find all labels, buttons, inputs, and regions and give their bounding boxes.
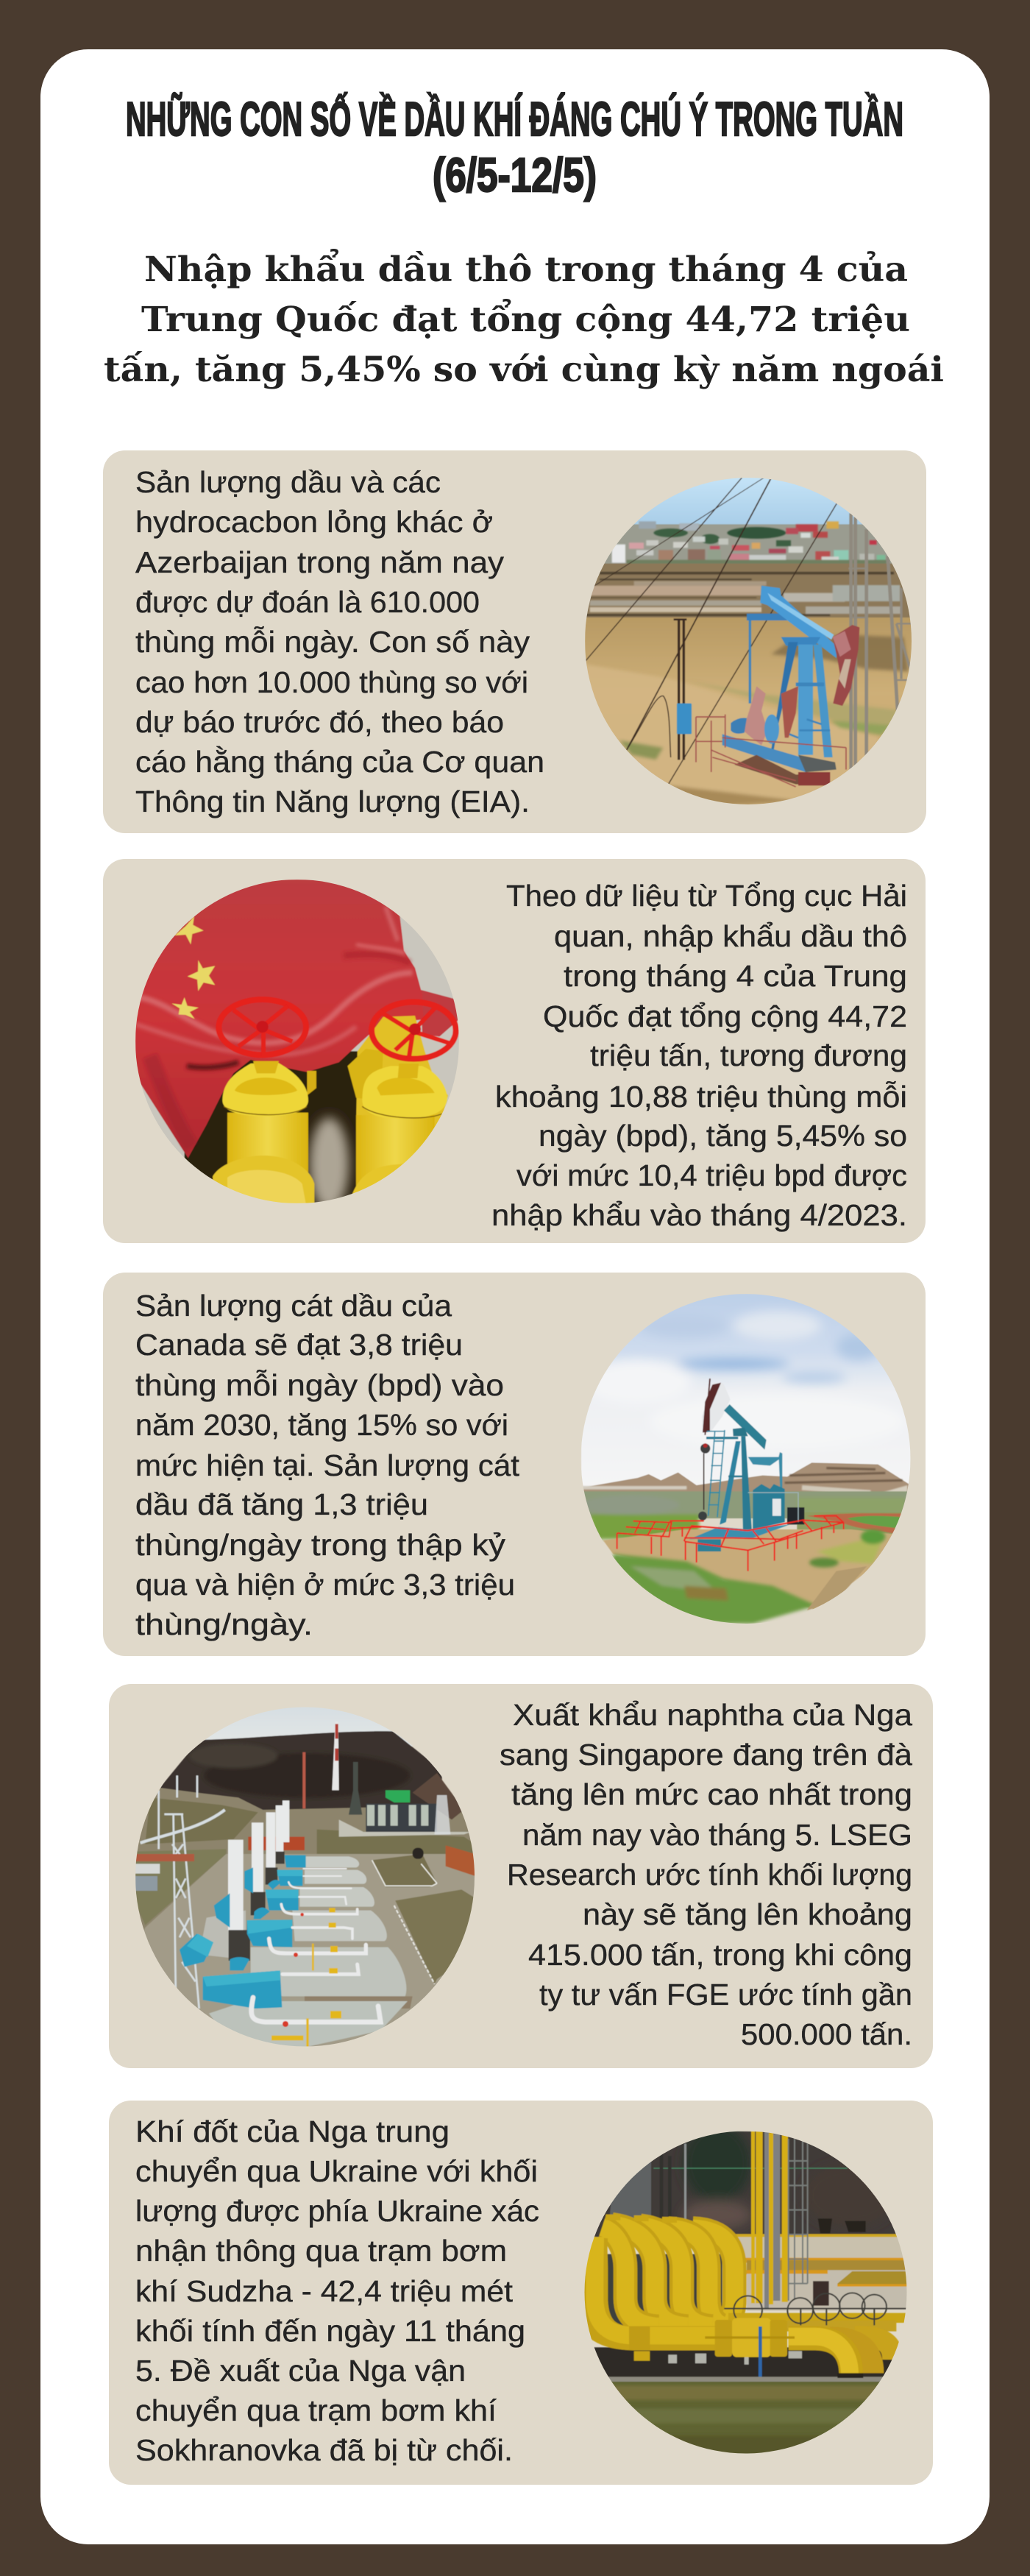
text: naphtha export estimates: Research ước tính khối lượng xyxy=(507,1858,912,1892)
text: Azerbaijan forecast: được dự đoán là 610.000 xyxy=(135,585,480,619)
text: China import figures: quan, nhập khẩu dầu thô xyxy=(554,919,907,953)
text: Sudzha gas transit: chuyển qua trạm bơm khí xyxy=(135,2393,497,2427)
panel: China crude imports xyxy=(103,859,926,1243)
text: naphtha export estimates: tăng lên mức cao nhất trong xyxy=(511,1777,912,1811)
subtitle headline: Trung Quốc đạt tổng cộng 44,72 triệu xyxy=(141,299,910,340)
text: naphtha export estimates: năm nay vào tháng 5. LSEG xyxy=(522,1818,912,1852)
text: China import figures: nhập khẩu vào tháng 4/2023. xyxy=(491,1198,907,1232)
text: Azerbaijan forecast: Thông tin Năng lượng (EIA). xyxy=(135,785,530,818)
title: (6/5-12/5) xyxy=(433,148,597,202)
text: Canada oil sands output: Canada sẽ đạt 3,8 triệu xyxy=(135,1328,463,1362)
text: Azerbaijan forecast: Azerbaijan trong năm nay xyxy=(135,545,505,579)
text: Canada oil sands output: qua và hiện ở mức 3,3 triệu xyxy=(135,1568,515,1602)
text: Sudzha gas transit: khối tính đến ngày 11 tháng xyxy=(135,2314,525,2348)
photo: gas compressor station aerial view xyxy=(135,1707,475,2047)
text: naphtha export estimates: 415.000 tấn, trong khi công xyxy=(528,1938,912,1972)
text: naphtha export estimates: Xuất khẩu naphtha của Nga xyxy=(513,1698,912,1732)
text: Canada oil sands output: thùng/ngày trong thập kỷ xyxy=(135,1528,506,1562)
text: Canada oil sands output: dầu đã tăng 1,3 triệu xyxy=(135,1487,428,1521)
text: Sudzha gas transit xyxy=(135,2115,539,2467)
text: naphtha export estimates: ty tư vấn FGE ước tính gần xyxy=(539,1978,912,2011)
title xyxy=(126,92,903,202)
text: Canada oil sands output xyxy=(135,1289,520,1641)
panel: Azerbaijan oil output xyxy=(103,450,926,833)
text: Sudzha gas transit: Khí đốt của Nga trung xyxy=(135,2115,450,2148)
text: Azerbaijan forecast: cao hơn 10.000 thùng so với xyxy=(135,665,528,699)
text: Canada oil sands output: mức hiện tại. Sản lượng cát xyxy=(135,1448,520,1482)
subtitle headline xyxy=(104,249,944,390)
text: naphtha export estimates: sang Singapore đang trên đà xyxy=(500,1738,912,1772)
text: naphtha export estimates: này sẽ tăng lên khoảng xyxy=(583,1897,912,1931)
text: Canada oil sands output: thùng/ngày. xyxy=(135,1607,313,1641)
text: Azerbaijan forecast: Sản lượng dầu và các xyxy=(135,465,441,499)
text: Azerbaijan forecast: dự báo trước đó, theo báo xyxy=(135,705,504,739)
text: Sudzha gas transit: nhận thông qua trạm bơm xyxy=(135,2234,507,2268)
text: Canada oil sands output: thùng mỗi ngày (bpd) vào xyxy=(135,1368,504,1402)
text: Sudzha gas transit: chuyển qua Ukraine với khối xyxy=(135,2154,538,2188)
text: Azerbaijan forecast xyxy=(135,465,544,818)
panel: Canada oil sands xyxy=(103,1273,926,1656)
text: Sudzha gas transit: 5. Đề xuất của Nga vận xyxy=(135,2354,466,2388)
panel: Russian naphtha exports xyxy=(109,1684,933,2068)
text: China import figures: Quốc đạt tổng cộng 44,72 xyxy=(543,999,907,1033)
text: China import figures: với mức 10,4 triệu bpd được xyxy=(516,1158,907,1192)
text: China import figures xyxy=(491,879,907,1232)
text: China import figures: Theo dữ liệu từ Tổng cục Hải xyxy=(506,879,907,913)
text: China import figures: triệu tấn, tương đương xyxy=(590,1038,907,1072)
text: Azerbaijan forecast: hydrocacbon lỏng khác ở xyxy=(135,505,493,539)
photo: Chinese flag over yellow pipe valves xyxy=(135,880,459,1211)
text: naphtha export estimates xyxy=(500,1698,912,2051)
text: Canada oil sands output: Sản lượng cát dầu của xyxy=(135,1289,452,1323)
text: Canada oil sands output: năm 2030, tăng 15% so với xyxy=(135,1408,508,1442)
photo: teal pump jack under cloudy sky xyxy=(581,1294,911,1624)
subtitle headline: Nhập khẩu dầu thô trong tháng 4 của xyxy=(144,249,908,290)
text: China import figures: trong tháng 4 của Trung xyxy=(564,959,907,993)
subtitle headline: tấn, tăng 5,45% so với cùng kỳ năm ngoái xyxy=(104,350,944,390)
text: China import figures: ngày (bpd), tăng 5,45% so xyxy=(539,1119,907,1153)
photo: yellow gas pipelines at pumping station xyxy=(585,2124,909,2455)
text: Sudzha gas transit: Sokhranovka đã bị từ chối. xyxy=(135,2433,513,2467)
text: Azerbaijan forecast: cáo hằng tháng của Cơ quan xyxy=(135,745,544,779)
panel: Russian gas transit via Ukraine xyxy=(109,2101,933,2485)
photo: blue pump jack in Azerbaijan oil field xyxy=(585,478,912,805)
text: Sudzha gas transit: khí Sudzha - 42,4 triệu mét xyxy=(135,2274,514,2308)
text: naphtha export estimates: 500.000 tấn. xyxy=(741,2017,912,2051)
text: Sudzha gas transit: lượng được phía Ukraine xác xyxy=(135,2194,539,2228)
text: China import figures: khoảng 10,88 triệu thùng mỗi xyxy=(495,1080,907,1114)
text: Azerbaijan forecast: thùng mỗi ngày. Con số này xyxy=(135,625,530,659)
